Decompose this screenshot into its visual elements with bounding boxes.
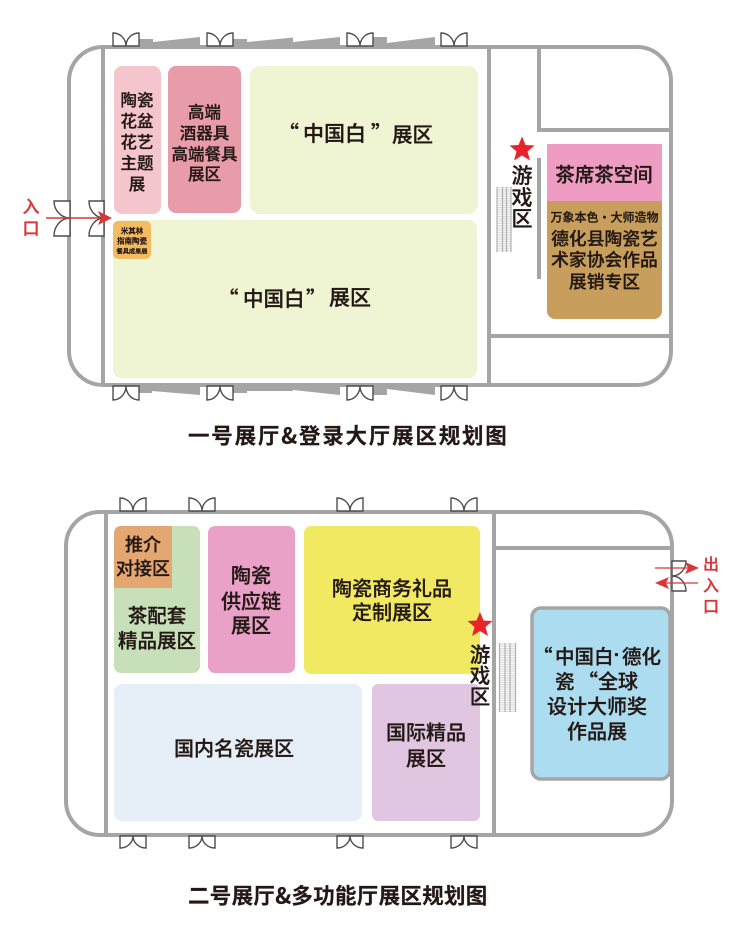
entrance arrow bbox=[46, 211, 112, 225]
panel: ceramic business gifts: 陶瓷商务礼品 bbox=[332, 572, 452, 602]
panel: Dehua ceramic artists association: 展销专区 bbox=[569, 268, 640, 294]
panel: China White lower: ” bbox=[306, 282, 326, 312]
exit and entrance label: 入 bbox=[703, 572, 719, 596]
panel: ceramic supply chain: 供应链 bbox=[221, 586, 281, 614]
hall 1 entrance doors bbox=[54, 201, 104, 236]
panel: matchmaking zone bbox=[114, 526, 172, 588]
panel: China White lower: 展区 bbox=[329, 282, 371, 312]
icon: star bbox=[468, 612, 492, 636]
panel: domestic famous porcelain: 国内名瓷展区 bbox=[174, 732, 294, 762]
hall 2 walls bbox=[66, 512, 672, 835]
game zone label: 游 bbox=[512, 160, 532, 190]
panel: global design master award: · bbox=[614, 644, 620, 666]
panel: global design master award: 设计大师奖 bbox=[547, 690, 647, 720]
panel: high-end drinkware and dining: 酒器具 bbox=[180, 120, 229, 144]
panel: tea accessories: 茶配套 bbox=[128, 600, 186, 628]
panel: China White upper: ” bbox=[371, 118, 392, 148]
stairs bbox=[499, 643, 516, 712]
hall 2 top doors bbox=[120, 498, 477, 511]
entrance label: 入 bbox=[22, 192, 40, 218]
panel: ceramic supply chain bbox=[208, 526, 295, 673]
panel: Dehua ceramic artists association: 万象本色・大师造物 bbox=[550, 208, 659, 226]
panel: Dehua ceramic artists association: 术家协会作品 bbox=[551, 246, 658, 272]
panel: high-end drinkware and dining: 展区 bbox=[188, 161, 221, 185]
game zone label bbox=[470, 638, 490, 710]
panel: China White upper: “ bbox=[278, 118, 299, 148]
game zone label bbox=[512, 160, 532, 233]
panel: Michelin guide ceramics: 指南陶瓷 bbox=[117, 236, 147, 246]
panel: ceramic business gifts bbox=[304, 526, 480, 674]
panel: ceramic flower pot theme: 花盆 bbox=[120, 108, 154, 132]
game zone label: 区 bbox=[512, 203, 532, 233]
panel: matchmaking zone: 推介 bbox=[125, 531, 161, 557]
panel: ceramic supply chain: 展区 bbox=[231, 610, 271, 638]
panel: ceramic supply chain: 陶瓷 bbox=[231, 560, 271, 588]
panel: ceramic business gifts: 定制展区 bbox=[352, 596, 432, 626]
panel: tea accessories: 精品展区 bbox=[118, 624, 196, 654]
panel: Michelin guide ceramics bbox=[113, 221, 151, 259]
exit and entrance arrows bbox=[655, 562, 699, 589]
panel: high-end drinkware and dining bbox=[168, 66, 241, 213]
entrance label: 口 bbox=[22, 214, 40, 240]
panel: Dehua ceramic artists association bbox=[547, 201, 662, 319]
panel: domestic famous porcelain bbox=[114, 684, 362, 821]
floor plan: hall 2 bbox=[66, 498, 719, 848]
hall 1 walls bbox=[69, 37, 671, 395]
hall 2 exit door bbox=[672, 561, 686, 591]
game zone label: 区 bbox=[470, 680, 490, 710]
title: hall 2: 二号展厅&多功能厅展区规划图 bbox=[188, 880, 488, 910]
icon: star bbox=[510, 136, 534, 160]
panel: Michelin guide ceramics: 米其林 bbox=[121, 226, 144, 236]
panel: China White upper: 中国白 bbox=[303, 118, 366, 148]
panel: global design master award: 中国白 bbox=[555, 640, 614, 670]
hall 1 top doors bbox=[113, 33, 467, 46]
panel: international boutique: 国际精品 bbox=[386, 716, 466, 746]
exit and entrance label: 口 bbox=[703, 593, 719, 617]
panel: tea space bbox=[547, 144, 662, 201]
panel: tea space: 茶席茶空间 bbox=[555, 158, 653, 188]
game zone label: 戏 bbox=[512, 182, 532, 212]
panel: matchmaking zone: 对接区 bbox=[116, 555, 170, 581]
floor plan: hall 1 bbox=[22, 33, 671, 400]
panel: global design master award: 作品展 bbox=[567, 716, 627, 744]
exit and entrance label: 出 bbox=[703, 551, 719, 575]
panel: ceramic flower pot theme: 主题 bbox=[120, 150, 154, 174]
panel: ceramic flower pot theme bbox=[114, 66, 161, 214]
game zone label: 游 bbox=[470, 638, 490, 668]
stairs bbox=[497, 187, 512, 252]
panel: high-end drinkware and dining: 高端 bbox=[188, 99, 221, 123]
panel: international boutique: 展区 bbox=[406, 742, 446, 772]
panel: ceramic flower pot theme: 花艺 bbox=[120, 129, 154, 153]
panel: China White upper bbox=[250, 66, 478, 214]
entrance label bbox=[22, 192, 40, 240]
panel: international boutique bbox=[372, 684, 480, 821]
panel: high-end drinkware and dining: 高端餐具 bbox=[172, 141, 238, 165]
hall 1 bottom doors bbox=[113, 386, 467, 400]
panel: global design master award: 德化 bbox=[622, 640, 661, 670]
panel: China White lower: “ bbox=[218, 282, 238, 312]
panel: Dehua ceramic artists association: 德化县陶瓷艺 bbox=[551, 225, 658, 251]
panel: global design master award: 瓷 bbox=[555, 666, 575, 694]
exit and entrance label bbox=[703, 551, 719, 617]
panel: tea accessories bbox=[114, 526, 200, 673]
panel: ceramic flower pot theme: 展 bbox=[129, 171, 145, 195]
panel: China White upper: 展区 bbox=[392, 118, 433, 148]
panel: global design master award bbox=[532, 608, 670, 779]
game zone label: 戏 bbox=[470, 659, 490, 689]
panel: Michelin guide ceramics: 餐具成果展 bbox=[117, 246, 147, 256]
title: hall 1: 一号展厅&登录大厅展区规划图 bbox=[188, 420, 509, 450]
panel: ceramic flower pot theme: 陶瓷 bbox=[120, 87, 154, 111]
hall 2 bottom doors bbox=[120, 836, 477, 848]
panel: China White lower: 中国白 bbox=[243, 282, 304, 312]
panel: global design master award: “全球 bbox=[578, 666, 638, 694]
panel: global design master award: “ bbox=[533, 640, 553, 670]
panel: China White lower bbox=[113, 220, 477, 378]
